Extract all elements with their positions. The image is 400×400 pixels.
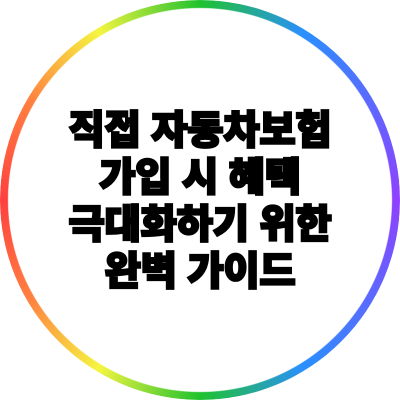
title: 가입 시 혜택 <box>99 156 301 200</box>
title: 극대화하기 위한 <box>69 203 331 247</box>
title: 직접 자동차보험 <box>69 109 331 153</box>
title <box>68 108 332 294</box>
title: 완벽 가이드 <box>105 250 295 294</box>
